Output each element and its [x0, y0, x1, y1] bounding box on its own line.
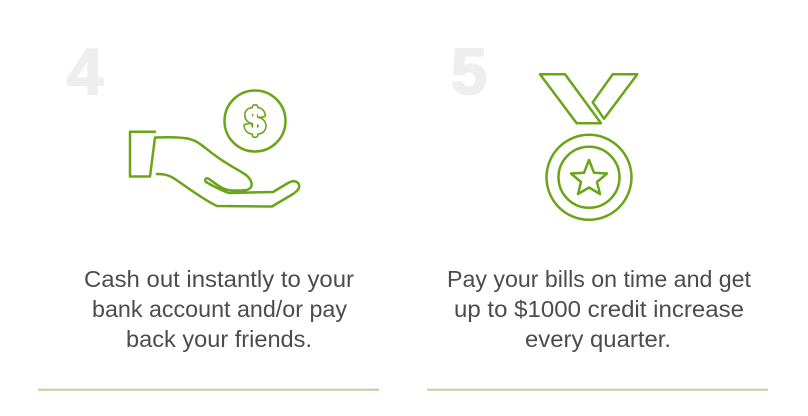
icon: medal	[540, 74, 637, 220]
divider: step 5	[427, 389, 768, 391]
icon: dollar coin: $	[245, 102, 265, 141]
icon: medal disc with star	[546, 135, 632, 220]
description: step 4: Cash out instantly to your	[84, 266, 354, 292]
description: step 4	[84, 266, 354, 352]
description: step 4: back your friends.	[126, 326, 312, 352]
icon: dollar coin	[224, 90, 286, 152]
description: step 5: every quarter.	[525, 326, 671, 352]
icon: hand	[130, 132, 299, 206]
panel: step 5	[447, 35, 751, 352]
icon: dollar coin: $	[245, 102, 265, 141]
description: step 5: Pay your bills on time and get	[447, 266, 751, 292]
icon: ribbon	[540, 74, 637, 123]
divider: step 4	[38, 389, 379, 391]
panel: step 4	[67, 35, 354, 352]
description: step 4: bank account and/or pay	[92, 296, 347, 322]
icon: hand receiving coin	[130, 90, 299, 206]
step number 4: 4	[67, 35, 103, 108]
step number 5: 5	[451, 35, 487, 108]
description: step 5: up to $1000 credit increase	[454, 296, 744, 322]
description: step 5	[447, 266, 751, 352]
